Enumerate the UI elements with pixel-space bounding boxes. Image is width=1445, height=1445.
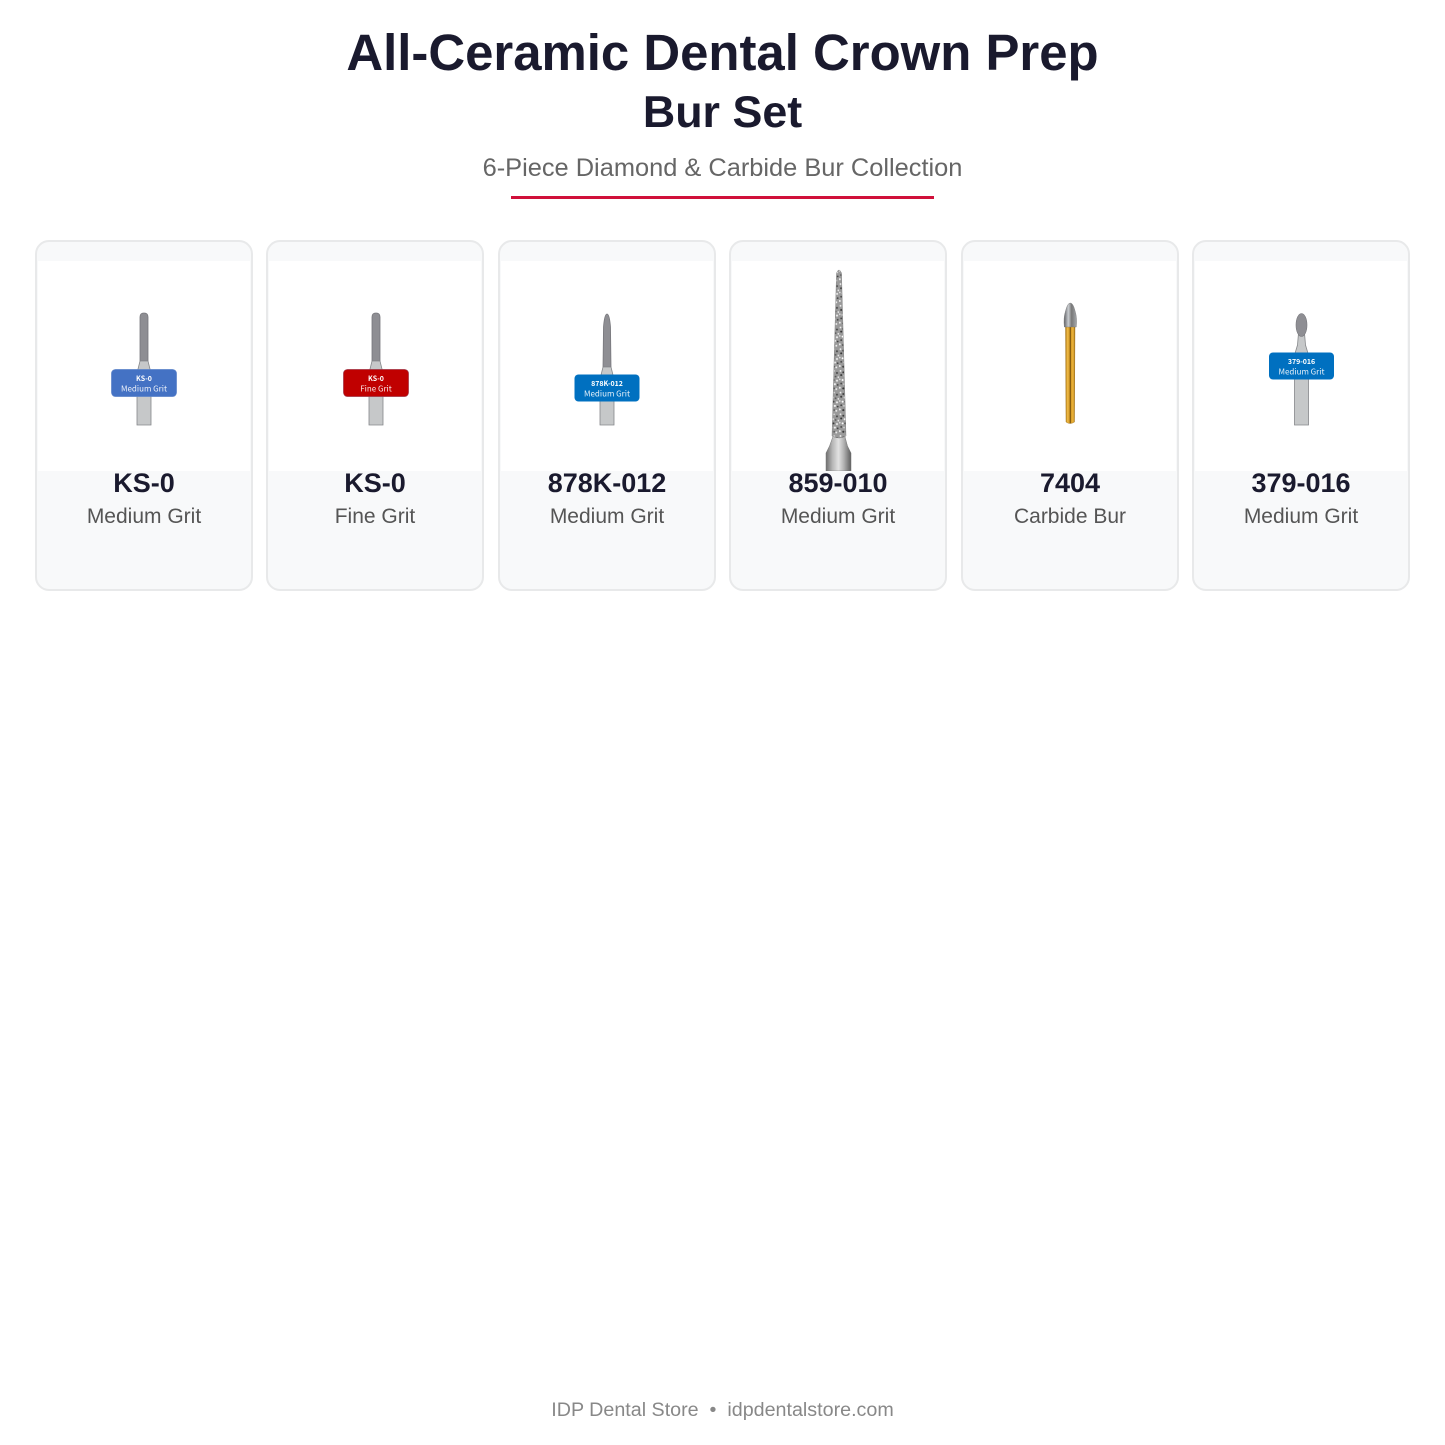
label badge: 878K-012 [591, 379, 623, 389]
grit label: Medium Grit [87, 505, 201, 528]
label badge: KS-0 [368, 374, 384, 384]
icon: bur neck and shank [826, 435, 851, 471]
title: All-Ceramic Dental Crown Prep [346, 24, 1099, 81]
footer: IDP Dental Store • idpdentalstore.com [551, 1399, 894, 1421]
icon: diamond tapered head [832, 270, 846, 438]
label badge: Fine Grit [360, 384, 392, 394]
grit label: Fine Grit [335, 505, 415, 528]
label badge: Medium Grit [121, 384, 167, 394]
icon: bur neck and shank [369, 361, 383, 425]
grit label: Carbide Bur [1014, 505, 1126, 528]
label badge: Medium Grit [584, 388, 630, 400]
label badge: 379-016 [1288, 357, 1315, 367]
product image: KS-0 fine [269, 261, 481, 471]
bur code: KS-0 [113, 468, 175, 498]
product image: KS-0 medium [38, 261, 250, 471]
product image: 878K-012 [501, 261, 713, 471]
grit label: Medium Grit [550, 505, 664, 528]
panel: 878K-012 [498, 240, 716, 591]
icon: bur neck and shank [1294, 333, 1308, 425]
title second line: Bur Set [643, 87, 802, 137]
panel: 379-016 [1192, 240, 1410, 591]
bur code: 7404 [1040, 468, 1100, 498]
panel: KS-0 fine grit [266, 240, 484, 591]
panel: 7404 [961, 240, 1179, 591]
icon: bur head [140, 313, 148, 361]
bur code: 379-016 [1251, 468, 1351, 498]
icon: bur head [372, 313, 380, 361]
product image: 379-016 [1195, 261, 1407, 471]
bur code: KS-0 [344, 468, 406, 498]
subtitle: 6-Piece Diamond & Carbide Bur Collection [483, 154, 962, 182]
icon: gold shank [1066, 326, 1075, 424]
label badge [112, 370, 176, 396]
icon: carbide head [1064, 303, 1077, 327]
grit label: Medium Grit [781, 505, 895, 528]
product image: 7404 [964, 261, 1176, 471]
label badge [1269, 352, 1334, 380]
label badge [344, 370, 408, 396]
label badge [574, 374, 640, 402]
icon: egg-shaped head [1296, 314, 1307, 336]
icon: bur neck and shank [600, 367, 614, 425]
accent divider [511, 196, 934, 199]
bur code: 878K-012 [548, 468, 666, 498]
panel: 859-010 [729, 240, 947, 591]
label badge: KS-0 [136, 374, 152, 384]
grit label: Medium Grit [1244, 505, 1358, 528]
product image: 859-010 [732, 261, 944, 471]
icon: bur neck and shank [137, 361, 151, 425]
bur code: 859-010 [788, 468, 888, 498]
icon: bur head [603, 314, 611, 367]
label badge: Medium Grit [1279, 366, 1324, 378]
panel: KS-0 medium grit [35, 240, 253, 591]
